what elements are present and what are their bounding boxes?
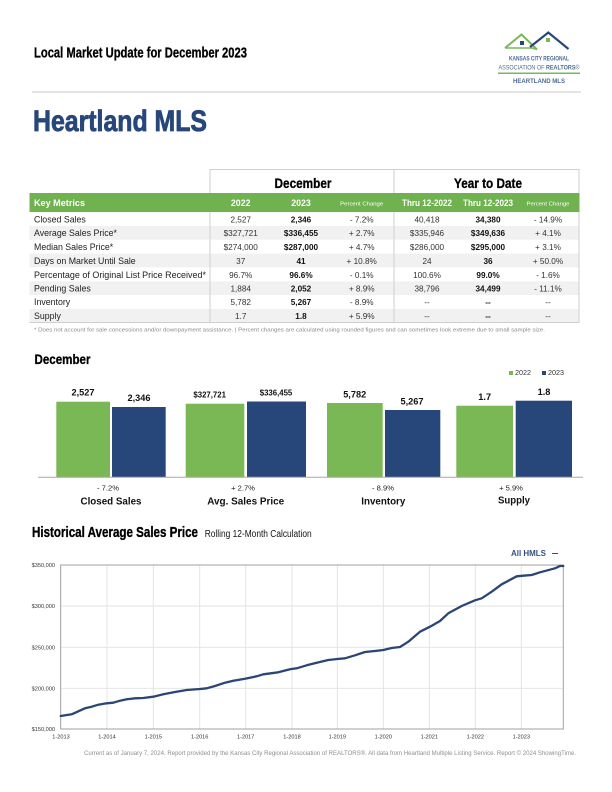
row: closed sales: 40,418 xyxy=(414,216,440,225)
footnote: * Does not account for sale concessions and/or downpayment assistance. | Percent changes are calculated using rounded figures and can sometimes look extreme due to small sample size. xyxy=(34,328,545,334)
row: average sales price xyxy=(34,228,561,238)
row: days on market: + 10.8% xyxy=(347,257,377,266)
row: inventory: -- xyxy=(545,298,551,307)
row: pending sales: Pending Sales xyxy=(34,284,91,294)
bars: closed sales: 2,527 xyxy=(72,388,94,398)
bars: supply: 1.7 xyxy=(478,392,491,402)
x axis labels: 1-2023 xyxy=(513,734,530,740)
row: average sales price: + 4.1% xyxy=(535,229,561,238)
row: supply: Supply xyxy=(34,311,61,321)
row: median sales price: $274,000 xyxy=(224,243,258,252)
bars: average sales price: $327,721 xyxy=(193,390,227,400)
y axis labels xyxy=(32,563,55,733)
x axis labels: 1-2022 xyxy=(467,734,484,740)
row: average sales price: $327,721 xyxy=(224,229,258,238)
row: inventory xyxy=(34,297,551,307)
row: days on market: 37 xyxy=(236,257,246,266)
bars: average sales price: + 2.7% xyxy=(231,484,255,492)
x axis labels: 1-2021 xyxy=(421,734,438,740)
row: closed sales: 34,380 xyxy=(475,216,501,225)
row: closed sales: - 7.2% xyxy=(350,216,374,225)
row: pending sales: 1,884 xyxy=(230,285,251,294)
bars: supply: 1.8 xyxy=(538,387,550,397)
row: closed sales: - 14.9% xyxy=(534,216,562,225)
x axis labels: 1-2015 xyxy=(145,734,162,740)
logo: ASSOCIATION OF REALTORS® xyxy=(498,64,580,72)
y axis labels: $150,000 xyxy=(32,727,55,733)
footer note: Current as of January 7, 2024. Report provided by the Kansas City Regional Association of REALTORS®. All data from Heartland Multiple Listing Service. Report © 2024 ShowingTime. xyxy=(84,750,576,757)
heading: December: December xyxy=(34,352,91,367)
row: supply: 1.7 xyxy=(235,312,247,321)
bars: inventory: - 8.9% xyxy=(372,484,394,492)
row: average sales price: + 2.7% xyxy=(349,229,375,238)
line chart: historical price xyxy=(32,563,563,740)
bars: supply: Supply xyxy=(498,496,530,506)
table header row: Key Metrics xyxy=(34,198,85,208)
row: closed sales: 2,346 xyxy=(291,216,312,225)
row: average sales price: $336,455 xyxy=(284,229,319,238)
row: days on market: Days on Market Until Sale xyxy=(34,256,136,266)
row: average sales price: $335,946 xyxy=(410,229,445,238)
row: pending sales: 34,499 xyxy=(475,285,501,294)
row: supply: -- xyxy=(485,312,491,321)
bars: average sales price xyxy=(186,388,306,508)
table header row: Thru 12-2023 xyxy=(463,198,513,208)
bars: inventory: Inventory xyxy=(361,496,406,508)
row: percentage of list price: 96.6% xyxy=(289,271,313,280)
row: percentage of list price: - 0.1% xyxy=(350,271,374,280)
x axis labels: 1-2017 xyxy=(237,734,254,740)
table group headings xyxy=(274,175,522,191)
row: supply: + 5.9% xyxy=(349,312,375,321)
legend: 2023 xyxy=(548,368,564,377)
data line xyxy=(61,566,563,716)
x axis labels: 1-2013 xyxy=(52,734,70,740)
bars: supply: + 5.9% xyxy=(499,484,523,492)
row: inventory: Inventory xyxy=(34,297,71,307)
bars: closed sales xyxy=(56,388,166,508)
row: inventory: -- xyxy=(485,298,491,307)
table header row: Percent Change xyxy=(526,202,570,208)
row: pending sales: 38,796 xyxy=(414,285,440,294)
table group headings: December xyxy=(274,175,332,191)
bars: supply xyxy=(456,387,572,506)
legend: 2022 xyxy=(515,368,531,377)
row: closed sales: 2,527 xyxy=(230,216,251,225)
table group headings: Year to Date xyxy=(454,175,522,191)
table header row: Percent Change xyxy=(340,202,383,208)
y axis labels: $250,000 xyxy=(32,645,55,651)
row: closed sales xyxy=(34,215,562,225)
row: median sales price: $286,000 xyxy=(410,243,445,252)
row: average sales price: Average Sales Price* xyxy=(34,228,118,238)
bars: average sales price: $336,455 xyxy=(260,388,293,398)
bars: closed sales: - 7.2% xyxy=(97,484,119,492)
row: supply: -- xyxy=(424,312,430,321)
bar chart: December xyxy=(38,387,583,508)
bars: closed sales: Closed Sales xyxy=(80,496,142,508)
table header row: Thru 12-2022 xyxy=(402,198,452,208)
row: median sales price xyxy=(34,242,561,252)
bars: average sales price: Avg. Sales Price xyxy=(207,496,285,508)
row: days on market: 36 xyxy=(483,257,493,266)
row: supply: -- xyxy=(545,312,551,321)
row: percentage of list price: 100.6% xyxy=(413,271,441,280)
row: percentage of list price: Percentage of Original List Price Received* xyxy=(34,270,207,280)
row: percentage of list price: - 1.6% xyxy=(536,271,560,280)
key metrics table xyxy=(30,170,580,322)
y axis labels: $200,000 xyxy=(32,686,55,692)
row: inventory: -- xyxy=(424,298,430,307)
bars: inventory: 5,782 xyxy=(343,390,366,400)
row: percentage of list price xyxy=(34,270,560,280)
y axis labels: $350,000 xyxy=(32,563,55,569)
x axis labels: 1-2014 xyxy=(98,734,116,740)
heading: historical average sales price: Historical Average Sales Price xyxy=(32,524,198,541)
x axis labels: 1-2018 xyxy=(283,734,301,740)
heading: Heartland MLS: Heartland MLS xyxy=(33,105,207,138)
x axis labels xyxy=(52,734,530,740)
table header row xyxy=(34,198,570,208)
bars: closed sales: 2,346 xyxy=(128,393,150,403)
row: inventory: 5,782 xyxy=(230,298,251,307)
row: days on market: 41 xyxy=(296,257,306,266)
row: inventory: - 8.9% xyxy=(350,298,374,307)
row: percentage of list price: 96.7% xyxy=(229,271,252,280)
row: supply xyxy=(34,311,551,321)
legend xyxy=(509,368,564,377)
table header row: 2022 xyxy=(231,198,251,208)
bars: inventory xyxy=(327,390,440,508)
logo: HEARTLAND MLS xyxy=(513,79,565,85)
logo xyxy=(498,32,580,85)
line legend: All HMLS: All HMLS xyxy=(511,549,547,558)
table header row: 2023 xyxy=(291,198,311,208)
row: pending sales: - 11.1% xyxy=(534,285,562,294)
title: local market update: Local Market Update for December 2023 xyxy=(34,44,247,62)
logo: KANSAS CITY REGIONAL xyxy=(509,56,569,62)
row: supply: 1.8 xyxy=(295,312,307,321)
row: median sales price: + 4.7% xyxy=(349,243,375,252)
subheading: rolling calculation: Rolling 12-Month Calculation xyxy=(205,529,312,540)
bars: inventory: 5,267 xyxy=(400,396,424,406)
row: percentage of list price: 99.0% xyxy=(476,271,500,280)
row: pending sales: + 8.9% xyxy=(349,285,375,294)
x axis labels: 1-2019 xyxy=(329,734,346,740)
row: median sales price: + 3.1% xyxy=(535,243,561,252)
row: days on market xyxy=(34,256,563,266)
y axis labels: $300,000 xyxy=(32,604,55,610)
row: average sales price: $349,636 xyxy=(471,229,506,238)
row: days on market: 24 xyxy=(422,257,432,266)
row: median sales price: Median Sales Price* xyxy=(34,242,114,252)
row: median sales price: $295,000 xyxy=(471,243,506,252)
row: pending sales xyxy=(34,284,562,294)
row: days on market: + 50.0% xyxy=(533,257,563,266)
row: inventory: 5,267 xyxy=(291,298,312,307)
row: closed sales: Closed Sales xyxy=(34,215,86,225)
row: pending sales: 2,052 xyxy=(291,285,312,294)
row: median sales price: $287,000 xyxy=(284,243,319,252)
x axis labels: 1-2020 xyxy=(375,734,392,740)
x axis labels: 1-2016 xyxy=(191,734,208,740)
